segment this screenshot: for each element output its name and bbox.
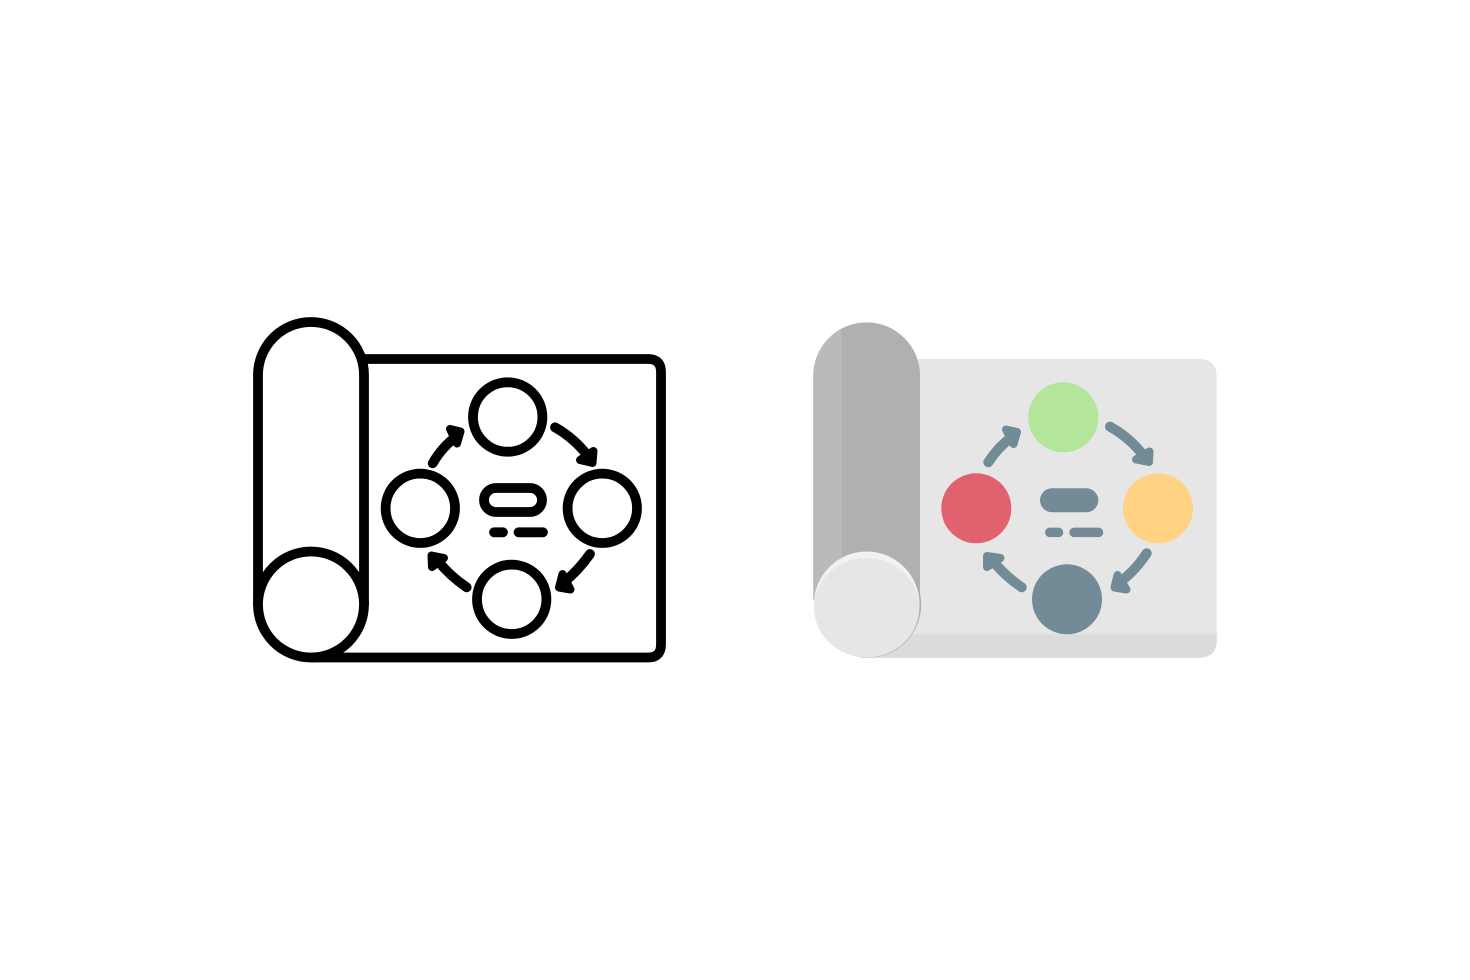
arrow: left to top bbox=[433, 429, 460, 463]
arrow: yellow to slate bbox=[1114, 553, 1147, 590]
flat roll end face bbox=[814, 558, 919, 657]
arrow: top to right bbox=[555, 427, 594, 463]
outline center short dash bbox=[494, 527, 503, 537]
icon: flat colour blueprint scroll bbox=[813, 322, 1217, 658]
arrow: slate to red bbox=[987, 556, 1022, 587]
outline node: bottom bbox=[477, 565, 546, 634]
arrow: right to bottom bbox=[559, 554, 590, 590]
flat roll end shadow bbox=[815, 551, 921, 658]
outline roll end bbox=[258, 552, 364, 658]
outline center long dash bbox=[518, 527, 543, 537]
outline paper sheet bbox=[311, 359, 661, 658]
outline node: left bbox=[386, 474, 455, 543]
flat paper bottom shade bbox=[860, 634, 1217, 658]
outline roll body bbox=[258, 322, 364, 604]
flat center label pill bbox=[1040, 488, 1098, 512]
outline node: right bbox=[568, 474, 637, 543]
flat node: yellow bbox=[1123, 473, 1193, 543]
outline center label pill bbox=[484, 488, 542, 512]
flat roll body bbox=[813, 322, 920, 600]
flat node: slate bbox=[1032, 564, 1102, 634]
flat node: green bbox=[1028, 382, 1098, 452]
icon: outline blueprint scroll bbox=[258, 322, 661, 658]
flat center short dash bbox=[1045, 528, 1063, 537]
flat paper sheet bbox=[860, 359, 1217, 658]
arrow: red to green bbox=[988, 430, 1017, 462]
arrow: green to yellow bbox=[1110, 427, 1150, 462]
flat center long dash bbox=[1069, 528, 1103, 537]
flat node: red bbox=[941, 473, 1011, 543]
flat roll end rim bbox=[814, 552, 920, 657]
arrow: bottom to left bbox=[432, 556, 467, 587]
flat roll left highlight bbox=[813, 328, 842, 600]
outline node: top bbox=[473, 382, 542, 452]
